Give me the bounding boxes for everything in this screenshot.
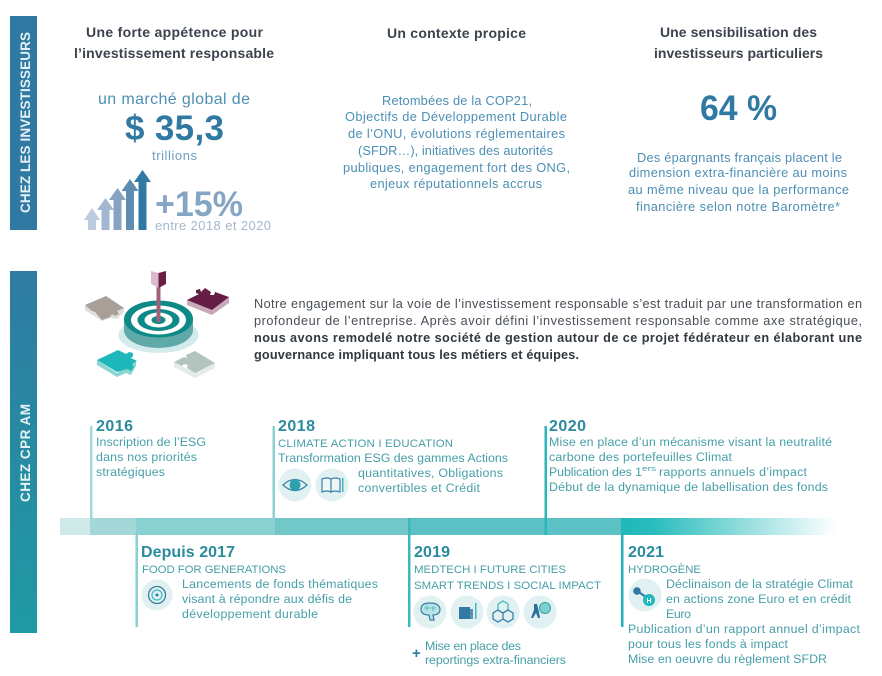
event: 2018: convertibles et Crédit xyxy=(358,481,481,495)
event: 2019: MEDTECH I FUTURE CITIES xyxy=(414,564,566,576)
stat: marché global: $ 35,3 xyxy=(125,109,224,148)
heading: sensibilisation xyxy=(654,24,823,61)
event: 2016: dans nos priorités xyxy=(96,450,197,464)
illustration: target and puzzle pieces xyxy=(85,271,229,378)
event: 2018 xyxy=(278,418,508,502)
event: 2021: 2021 xyxy=(628,544,664,561)
text: engagement paragraph: Notre engagement sur la voie de l’investissement responsable s’est traduit par une transformation en xyxy=(254,297,862,311)
text: épargnants: au même niveau que la performance xyxy=(628,182,849,197)
timeline band xyxy=(60,426,836,627)
stat: +15% xyxy=(155,185,271,233)
panel: contexte propice xyxy=(343,25,570,191)
stat: marché global xyxy=(98,91,250,163)
icon: cubes xyxy=(486,596,520,628)
stat: +15%: entre 2018 et 2020 xyxy=(155,218,271,233)
panel: chez les investisseurs label: CHEZ LES INVESTISSEURS xyxy=(18,32,33,213)
event: 2019: 2019 xyxy=(414,544,450,561)
event: depuis 2017: Lancements de fonds thématiques xyxy=(182,577,378,591)
event: 2019: SMART TRENDS I SOCIAL IMPACT xyxy=(414,580,601,592)
event: 2018: Transformation ESG des gammes Actions xyxy=(278,451,508,465)
event: depuis 2017 xyxy=(141,544,378,621)
heading: sensibilisation: investisseurs particuliers xyxy=(654,45,823,61)
event: 2021: HYDROGÈNE xyxy=(628,563,701,576)
heading: forte appétence: Une forte appétence pour xyxy=(86,24,264,40)
event: 2020: rapports annuels d’impact xyxy=(659,465,808,479)
panel: chez les investisseurs label xyxy=(10,16,37,230)
event: 2018: quantitatives, Obligations xyxy=(358,466,503,480)
icon: eye xyxy=(278,468,312,502)
text: engagement paragraph: profondeur de l’entreprise. Après avoir défini l’investissement responsable comme axe stratégique, xyxy=(254,314,862,328)
text: reportings: Mise en place des xyxy=(425,639,521,653)
icon: hydrogen xyxy=(628,578,662,612)
text: épargnants xyxy=(628,150,849,214)
event: 2016: stratégiques xyxy=(96,465,165,479)
icon: book xyxy=(316,468,348,502)
event: depuis 2017: FOOD FOR GENERATIONS xyxy=(142,564,286,576)
event: 2021: pour tous les fonds à impact xyxy=(628,637,789,651)
text: contexte: Objectifs de Développement Durable xyxy=(345,109,567,124)
text: contexte: (SFDR…), initiatives des autorités xyxy=(358,143,553,158)
text: contexte: enjeux réputationnels accrus xyxy=(370,176,542,191)
panel: chez cpr am label: CHEZ CPR AM xyxy=(18,404,33,502)
event: 2020: Mise en place d’un mécanisme visant la neutralité xyxy=(549,435,832,449)
event: 2019 xyxy=(412,544,601,667)
event: 2016: Inscription de l’ESG xyxy=(96,435,206,449)
heading: sensibilisation: Une sensibilisation des xyxy=(660,24,817,40)
text: épargnants: dimension extra-financière au moins xyxy=(629,165,847,180)
event: 2021 xyxy=(628,544,861,666)
icon: brain xyxy=(414,596,446,628)
puzzle: maroon xyxy=(187,288,229,315)
event: 2021: Déclinaison de la stratégie Climat xyxy=(666,577,854,591)
event: depuis 2017: développement durable xyxy=(182,607,318,621)
icon: rising arrows xyxy=(84,170,151,230)
stat: +15%: +15% xyxy=(155,185,243,224)
stat: marché global: trillions xyxy=(152,148,198,163)
panel: forte appétence xyxy=(74,24,274,233)
text: épargnants: financière selon notre Baromètre* xyxy=(636,199,840,214)
text: contexte: de l’ONU, évolutions réglementaires xyxy=(348,126,565,141)
event: 2020: Publication des 1 xyxy=(549,465,642,479)
heading: forte appétence: l’investissement responsable xyxy=(74,45,274,61)
event: depuis 2017: visant à répondre aux défis de xyxy=(182,592,352,606)
text: engagement paragraph: nous avons remodelé notre société de gestion autour de ce projet fédérateur en élaborant une xyxy=(254,331,862,345)
event: 2018: CLIMATE ACTION I EDUCATION xyxy=(278,438,453,450)
icon: food cycle xyxy=(142,580,172,610)
event: 2020: Début de la dynamique de labellisation des fonds xyxy=(549,480,828,494)
icon: city xyxy=(450,596,484,628)
text: reportings xyxy=(425,639,566,667)
event: 2020: 2020 xyxy=(549,418,586,435)
event: depuis 2017: Depuis 2017 xyxy=(141,544,235,561)
text: contexte xyxy=(343,93,570,191)
stat: 64 %: 64 % xyxy=(700,89,777,128)
event: 2021: Mise en oeuvre du règlement SFDR xyxy=(628,652,827,666)
text: épargnants: Des épargnants français placent le xyxy=(637,150,842,165)
plus sign: + xyxy=(412,645,421,662)
stat: marché global: un marché global de xyxy=(98,91,250,108)
panel: sensibilisation xyxy=(628,24,849,214)
puzzle: grey xyxy=(174,351,215,378)
event: 2020: carbone des portefeuilles Climat xyxy=(549,450,733,464)
event: 2020 xyxy=(549,418,832,494)
text: engagement paragraph: gouvernance impliquant tous les métiers et équipes. xyxy=(254,348,579,362)
panel: chez cpr am label xyxy=(10,271,37,633)
heading: forte appétence xyxy=(74,24,274,61)
puzzle: teal xyxy=(97,350,137,377)
event: 2016: 2016 xyxy=(96,418,133,435)
puzzle: taupe xyxy=(85,296,124,321)
text: reportings: reportings extra-financiers xyxy=(425,653,566,667)
heading: contexte propice: Un contexte propice xyxy=(387,25,526,41)
icon: walker and globe xyxy=(524,596,556,628)
event: 2020: ers xyxy=(642,464,656,473)
event: 2021: Euro xyxy=(666,607,691,621)
event: 2016 xyxy=(96,418,206,479)
event: 2021: Publication d’un rapport annuel d’impact xyxy=(628,622,861,636)
event: 2021: en actions zone Euro et en crédit xyxy=(666,592,852,606)
text: contexte: Retombées de la COP21, xyxy=(382,93,532,108)
text: contexte: publiques, engagement fort des ONG, xyxy=(343,160,570,175)
text: engagement paragraph xyxy=(254,297,862,362)
event: 2018: 2018 xyxy=(278,418,315,435)
icon: hydrogen: H xyxy=(646,598,652,605)
